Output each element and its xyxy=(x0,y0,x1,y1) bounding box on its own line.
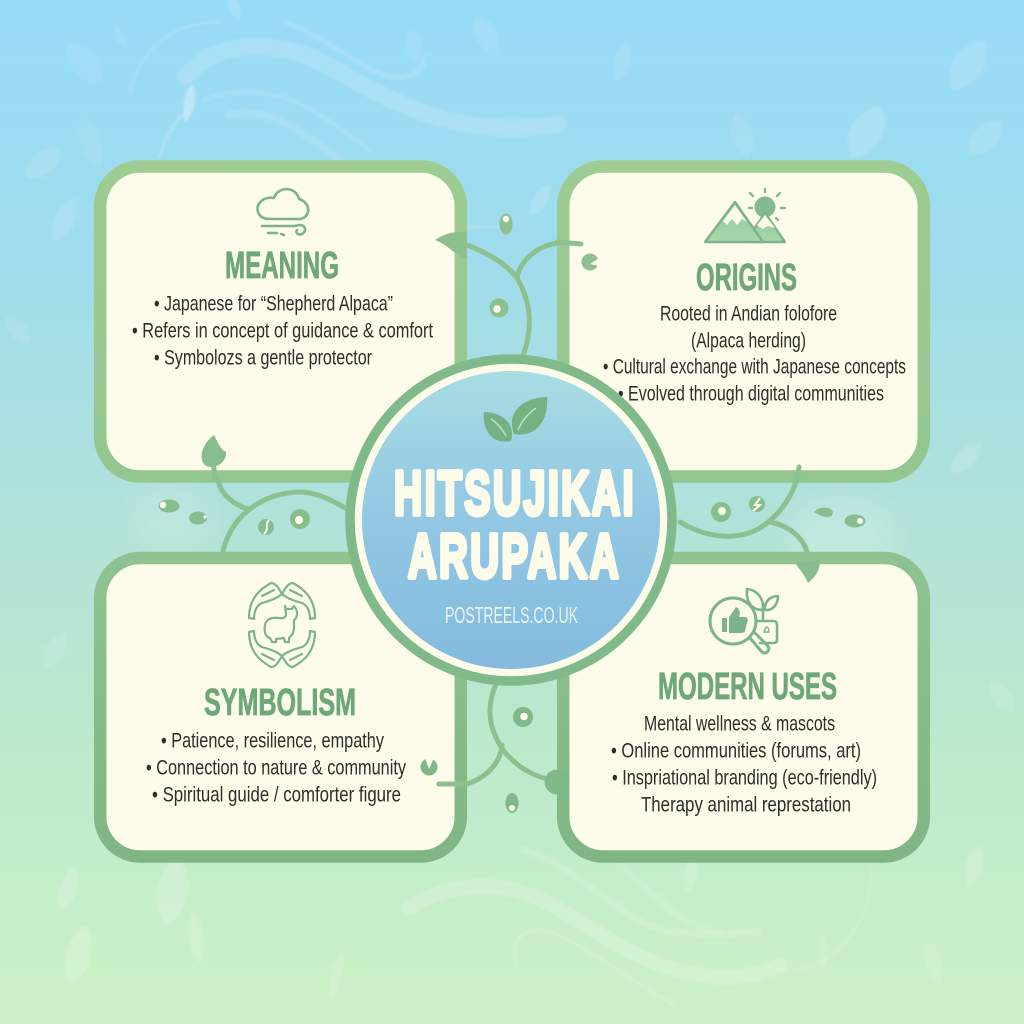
icon: magnifier with thumbs up and plant xyxy=(710,589,778,653)
text: modern uses bullets xyxy=(611,712,877,816)
text: meaning bullets: • Symbolozs a gentle protector xyxy=(154,346,372,370)
dots: bottom gap xyxy=(420,707,533,813)
panel: origins xyxy=(563,166,924,476)
vines: right gap xyxy=(680,467,866,583)
heading: meaning: MEANING xyxy=(225,245,339,287)
title: hitsujikai arupaka: HITSUJIKAI xyxy=(394,460,636,528)
text: origins bullets xyxy=(603,302,906,406)
heading: origins: ORIGINS xyxy=(696,257,797,299)
title: hitsujikai arupaka xyxy=(394,460,636,592)
text: meaning bullets: • Japanese for “Shepherd Alpaca” xyxy=(154,292,393,316)
icon: two leaves xyxy=(484,397,547,442)
dots: top gap xyxy=(490,214,599,318)
leaf: left gap xyxy=(202,435,226,467)
heading: modern uses: MODERN USES xyxy=(658,666,837,708)
vines: bottom gap xyxy=(420,684,570,813)
vines: top gap xyxy=(435,214,599,356)
text: origins bullets: Rooted in Andian folofore xyxy=(660,302,837,326)
leaf: right gap xyxy=(795,560,820,583)
text: symbolism bullets: • Spiritual guide / comforter figure xyxy=(152,784,401,806)
text: modern uses bullets: Therapy animal represtation xyxy=(641,794,851,816)
dots: left gap xyxy=(158,500,310,535)
text: symbolism bullets: • Patience, resilience, empathy xyxy=(161,730,384,752)
panel: modern uses xyxy=(563,558,924,856)
text: origins bullets: (Alpaca herding) xyxy=(691,330,806,352)
dots: right gap xyxy=(711,496,866,528)
text: meaning bullets xyxy=(132,292,433,370)
heading: symbolism: SYMBOLISM xyxy=(204,682,356,724)
background glow blobs xyxy=(128,486,897,573)
website label: POSTREELS.CO.UK xyxy=(445,602,578,628)
title: hitsujikai arupaka: ARUPAKA xyxy=(408,522,621,592)
text: meaning bullets: • Refers in concept of guidance & comfort xyxy=(132,320,433,342)
leaf: top gap xyxy=(435,232,467,258)
panel: meaning xyxy=(100,166,461,476)
central circle badge xyxy=(350,359,672,681)
text: origins bullets: • Evolved through digital communities xyxy=(618,382,884,406)
text: modern uses bullets: • Online communities (forums, art) xyxy=(611,740,861,762)
panel: symbolism xyxy=(100,558,461,856)
text: modern uses bullets: • Inspriational branding (eco-friendly) xyxy=(612,766,877,790)
text: modern uses bullets: Mental wellness & mascots xyxy=(644,712,835,736)
icon: hands around alpaca xyxy=(249,583,315,667)
vines: left gap xyxy=(158,435,345,551)
icon: cloud with wind xyxy=(257,189,308,235)
text: symbolism bullets xyxy=(146,730,406,806)
text: symbolism bullets: • Connection to nature & community xyxy=(146,756,406,780)
leaf: bottom gap xyxy=(544,770,570,794)
text: origins bullets: • Cultural exchange with Japanese concepts xyxy=(603,356,906,378)
icon: mountains and sun xyxy=(705,189,785,242)
